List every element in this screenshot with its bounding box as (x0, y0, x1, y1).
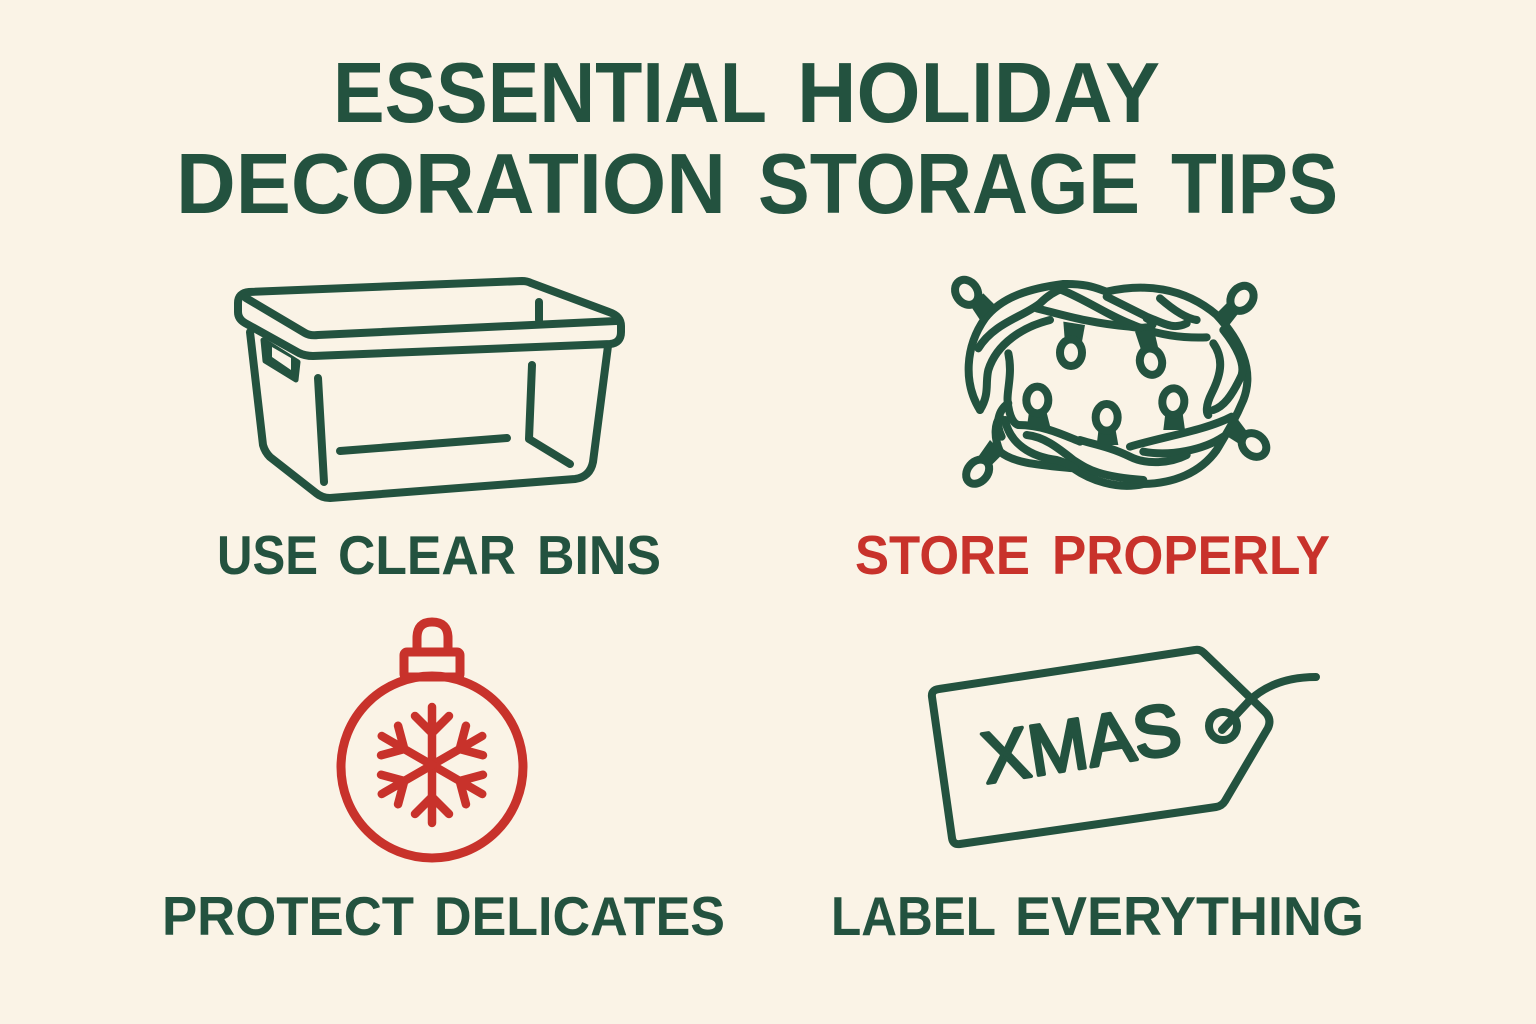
bulb: lower left (1026, 387, 1051, 428)
label: protect delicates: DELICATES (434, 885, 725, 947)
tag text: XMAS (976, 689, 1186, 799)
icon: clear storage bin (238, 281, 621, 498)
label: label everything: EVERYTHING (1015, 885, 1364, 947)
bulb: corner top left (950, 275, 995, 320)
title (176, 46, 1338, 232)
label: label everything: LABEL (831, 885, 996, 947)
label: store properly: PROPERLY (1052, 524, 1330, 586)
bulb: corner bottom left (961, 440, 1003, 488)
bulb: lower middle (1096, 404, 1118, 445)
bin handle (263, 340, 298, 380)
bulb: inner top right (1135, 330, 1165, 377)
label: use clear bins: BINS (537, 524, 661, 586)
label: use clear bins (217, 524, 661, 586)
title: ESSENTIAL (333, 46, 767, 141)
label: protect delicates: PROTECT (162, 885, 414, 947)
bulb: corner top right (1213, 281, 1258, 328)
icon: xmas gift tag (932, 650, 1316, 844)
label: protect delicates (162, 885, 725, 947)
title: DECORATION (176, 137, 726, 232)
title: STORAGE (758, 137, 1140, 232)
icon: ornament with snowflake (341, 622, 523, 858)
title: TIPS (1171, 137, 1338, 232)
icon: tangled string lights (950, 275, 1271, 488)
label: use clear bins: USE (217, 524, 318, 586)
bulb: inner top left (1060, 322, 1085, 366)
label: label everything (831, 885, 1364, 947)
label: store properly: STORE (855, 524, 1030, 586)
label: store properly (855, 524, 1330, 586)
title: HOLIDAY (797, 46, 1160, 141)
bulb: corner bottom right (1225, 420, 1271, 462)
snowflake (373, 707, 491, 823)
label: use clear bins: CLEAR (338, 524, 516, 586)
bulb: lower right (1161, 387, 1185, 430)
